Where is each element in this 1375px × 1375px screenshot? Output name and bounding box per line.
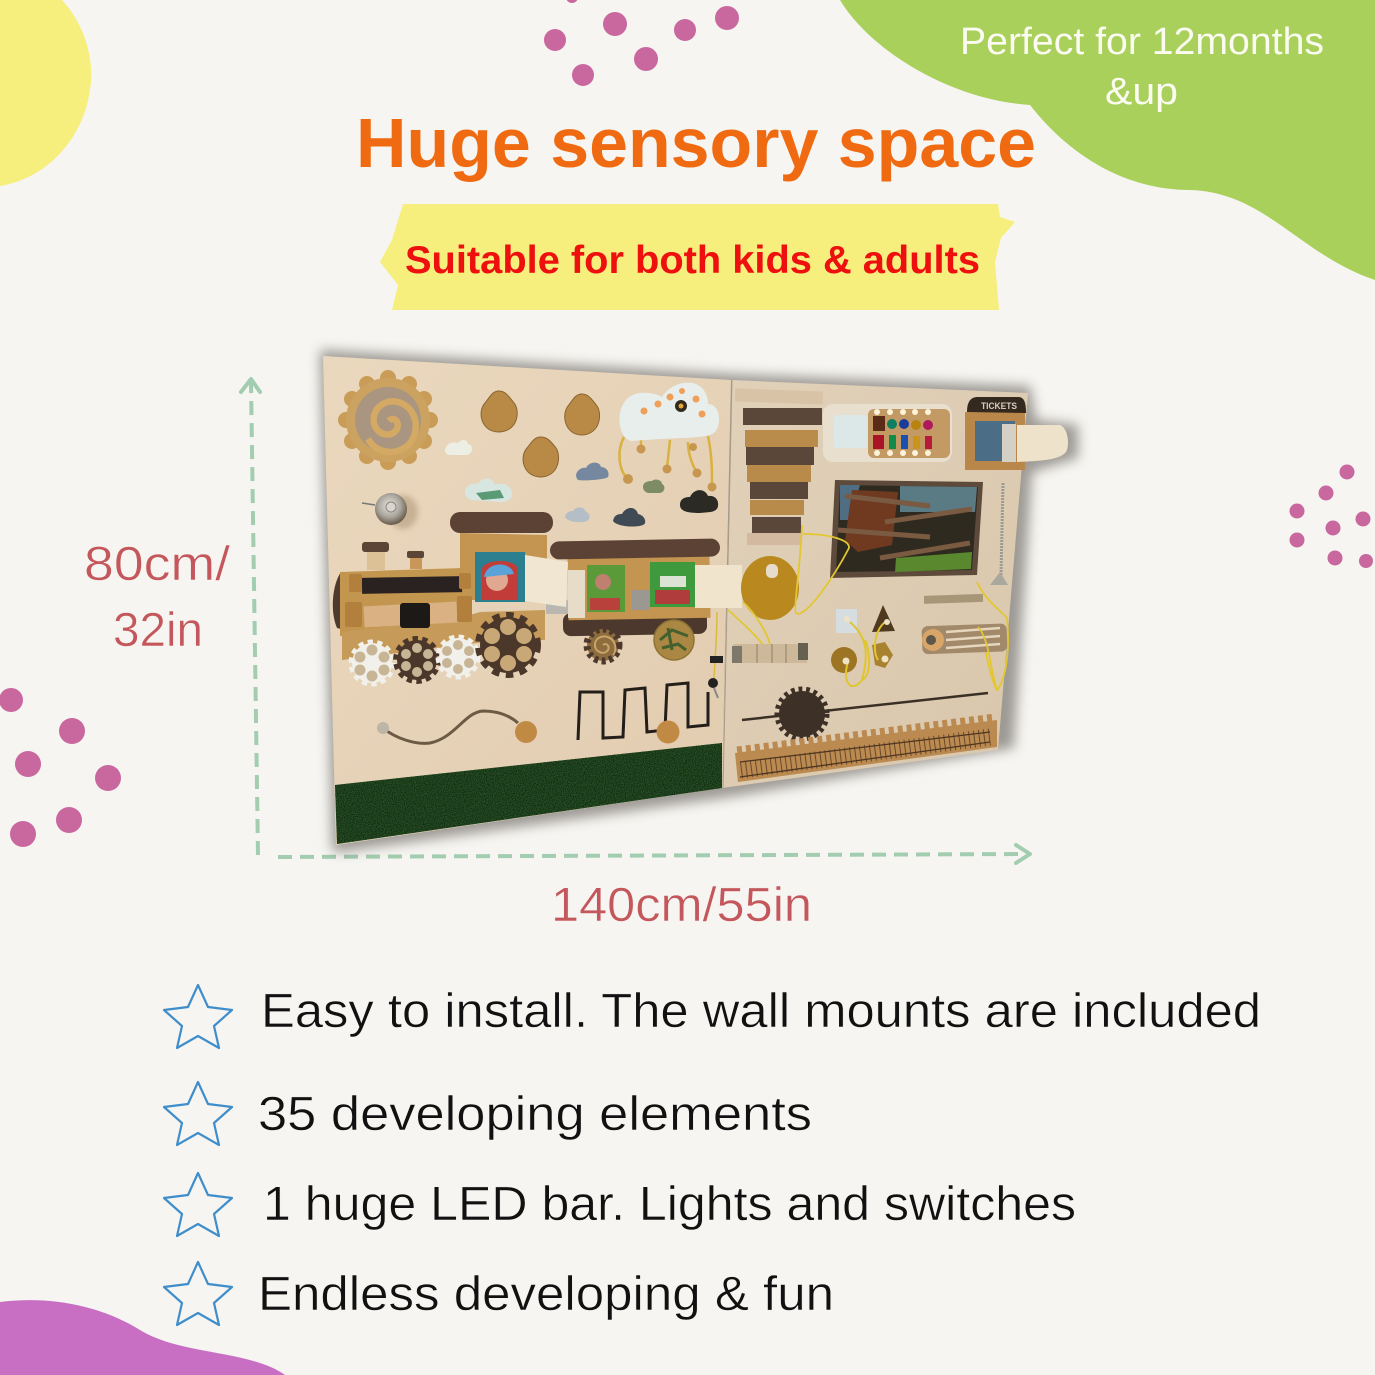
- feature: 35 elements: 35 developing elements: [258, 1088, 812, 1141]
- feature: easy to install: Easy to install. The wall mounts are included: [261, 985, 1261, 1038]
- train wagon: [550, 539, 720, 636]
- train locomotive: [333, 512, 553, 660]
- tickets box: [965, 397, 1068, 470]
- ball chain pull bell: [990, 483, 1008, 585]
- right board panel: [722, 380, 1028, 788]
- pink dots: left: [0, 688, 121, 847]
- width dimension arrow: [278, 845, 1030, 863]
- labyrinth window: [830, 480, 983, 578]
- age badge text: Perfect for 12months: [960, 21, 1324, 63]
- small wagon gears: [587, 620, 694, 661]
- feature: LED bar: 1 huge LED bar. Lights and switches: [263, 1178, 1076, 1231]
- panel seam: [723, 380, 732, 788]
- fidget roller: [732, 643, 808, 663]
- busy board photo: [320, 350, 1078, 852]
- height dimension arrow: [241, 379, 260, 855]
- title: Huge sensory space: [356, 104, 1036, 182]
- sliding tracks with knobs: [377, 683, 708, 744]
- age badge text: [960, 21, 1324, 113]
- yellow corner blob: [0, 0, 91, 186]
- feature: endless fun: [164, 1262, 834, 1325]
- height label: [84, 538, 231, 657]
- subtitle ribbon: Suitable for both kids & adults: [405, 239, 980, 282]
- age badge text: &up: [1105, 71, 1178, 113]
- green corner blob: [840, 0, 1375, 280]
- wooden fence: [735, 717, 997, 782]
- mirror clouds: [445, 440, 718, 527]
- sliding gear and slot: [742, 691, 988, 737]
- gold disc and yellow cords: [728, 525, 1008, 690]
- feature: 35 elements: [164, 1082, 812, 1145]
- train pictures and doors: [475, 552, 742, 618]
- cord shapes: [831, 605, 895, 686]
- height label: 32in: [113, 604, 203, 657]
- wooden rotating drum: [921, 594, 1007, 690]
- pink dots: top: [544, 0, 739, 86]
- pink dots: right: [1290, 464, 1373, 568]
- board shadow: [320, 350, 1078, 852]
- sun spiral: [338, 370, 438, 470]
- train gears: [352, 617, 536, 683]
- key and lock: [708, 612, 723, 698]
- grass strip: [335, 743, 722, 844]
- feature list: [164, 985, 1261, 1325]
- hanging cloud with beads: [619, 383, 719, 492]
- xylophone bars: [735, 388, 823, 545]
- height label: 80cm/: [84, 538, 231, 591]
- subtitle ribbon: [380, 204, 1015, 310]
- purple corner blob: [0, 1300, 285, 1375]
- left board panel: [323, 356, 731, 845]
- wooden pears: [481, 391, 600, 477]
- tickets box: TICKETS: [981, 401, 1017, 411]
- bicycle bell: [362, 493, 418, 529]
- width label: 140cm/55in: [551, 879, 812, 932]
- feature: endless fun: Endless developing & fun: [258, 1268, 834, 1321]
- LED switch panel: [823, 404, 952, 462]
